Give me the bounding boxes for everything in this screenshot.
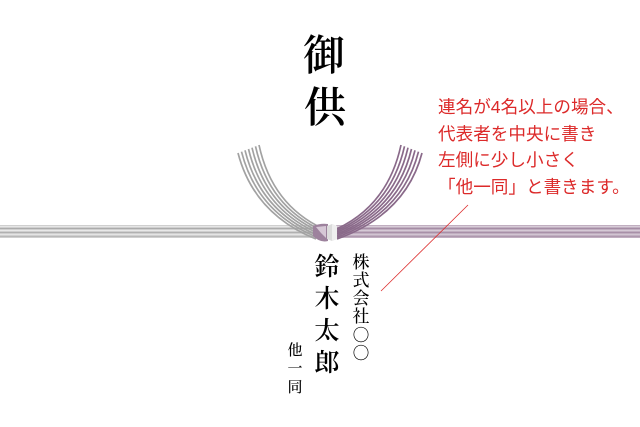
- representative name: 鈴木太郎: 木: [314, 279, 340, 315]
- company name: 株式会社○○: ○: [352, 339, 370, 364]
- title: 御供: 供: [304, 75, 348, 135]
- title: 御供: 御: [303, 23, 345, 83]
- left gray fan of cords: [238, 145, 323, 239]
- company name: 株式会社○○: 社: [352, 302, 370, 327]
- callout leader line: [381, 205, 468, 291]
- company name: 株式会社○○: 式: [352, 266, 370, 291]
- callout text: 「他一同」と書きます。: [438, 177, 630, 197]
- left gray horizontal cord: [0, 225, 322, 238]
- representative name: 鈴木太郎: 太: [314, 311, 340, 347]
- company name: 株式会社○○: [352, 248, 370, 364]
- right purple horizontal cord: [336, 225, 640, 238]
- representative name: 鈴木太郎: 郎: [314, 343, 340, 379]
- callout text: [438, 97, 630, 197]
- callout text: 代表者を中央に書き: [438, 124, 596, 144]
- others: 他一同: 一: [287, 357, 303, 378]
- company name: 株式会社○○: ○: [352, 321, 370, 346]
- company name: 株式会社○○: 株: [352, 248, 370, 273]
- callout text: 連名が4名以上の場合、: [438, 97, 624, 117]
- title: 御供: [303, 23, 348, 135]
- representative name: 鈴木太郎: [314, 247, 340, 379]
- others: 他一同: 同: [287, 376, 303, 397]
- knot: [313, 224, 337, 241]
- representative name: 鈴木太郎: 鈴: [314, 247, 340, 283]
- callout text: 左側に少し小さく: [438, 150, 579, 170]
- right purple fan of cords: [337, 145, 422, 239]
- others: 他一同: [287, 339, 303, 397]
- others: 他一同: 他: [287, 339, 303, 360]
- company name: 株式会社○○: 会: [352, 284, 370, 309]
